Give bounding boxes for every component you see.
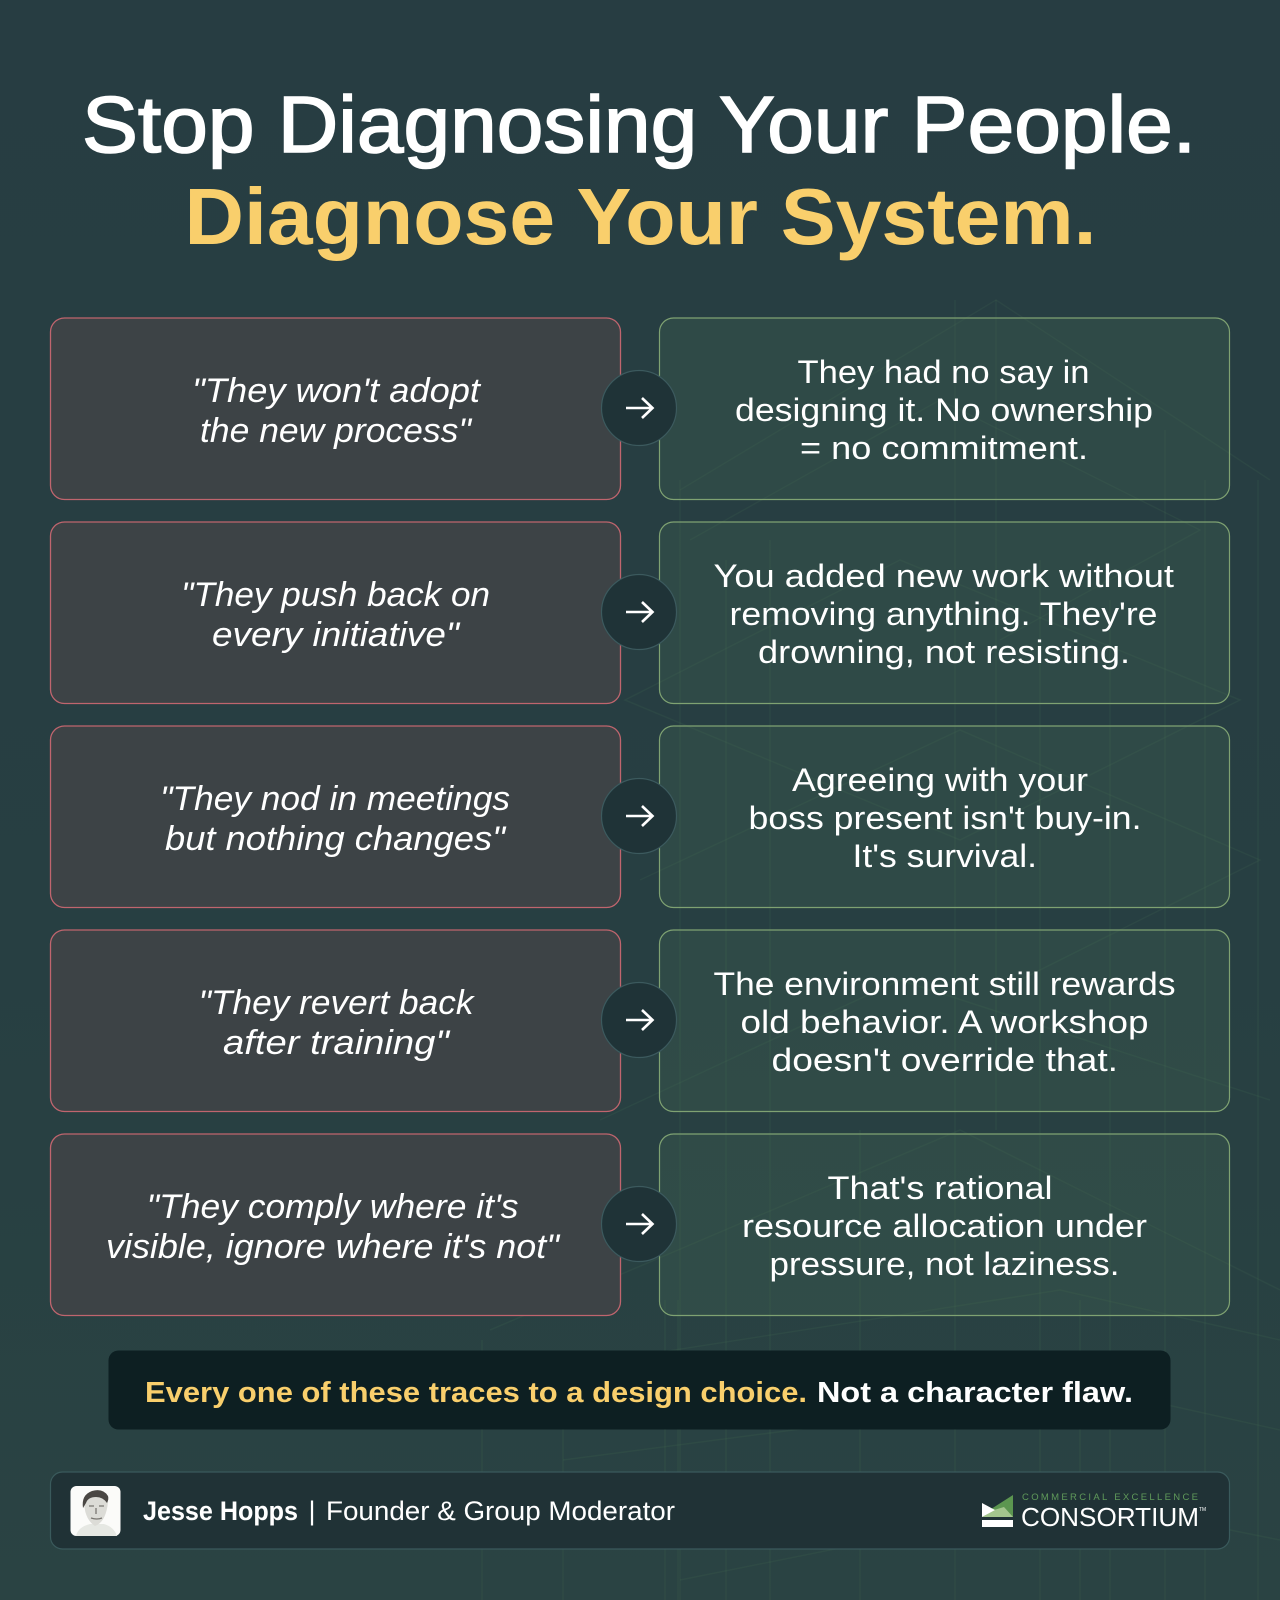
- logo: Commercial Excellence Consortium: TM: [1199, 1507, 1206, 1513]
- row 4: [50, 930, 1230, 1112]
- panel: blame statement 4: [50, 930, 620, 1112]
- panel: system cause 3: [660, 726, 1230, 908]
- panel: blame statement 1: "They won't adopt: [192, 372, 482, 410]
- panel: system cause 1: = no commitment.: [800, 430, 1088, 466]
- panel: blame statement 2: every initiative": [212, 616, 461, 654]
- panel: blame statement 1: [50, 318, 620, 500]
- footer bar: [50, 1472, 1230, 1549]
- row 2: [50, 522, 1230, 704]
- panel: system cause 2: [660, 522, 1230, 704]
- icon: arrow 4: [602, 982, 676, 1058]
- panel: blame statement 4: "They revert back: [198, 984, 476, 1022]
- panel: blame statement 2: "They push back on: [181, 576, 490, 614]
- panel: system cause 1: They had no say in: [798, 354, 1090, 390]
- title: Stop Diagnosing Your People.: [82, 80, 1196, 169]
- author name and role: [143, 1496, 675, 1526]
- logo: Commercial Excellence Consortium: COMMERCIAL EXCELLENCE: [1022, 1492, 1198, 1503]
- panel: system cause 4: [660, 930, 1230, 1112]
- logo: Commercial Excellence Consortium: CONSORTIUM: [1021, 1502, 1199, 1532]
- logo: Commercial Excellence Consortium: [982, 1492, 1206, 1532]
- icon: arrow 2: [602, 574, 676, 650]
- author name and role: Founder & Group Moderator: [326, 1496, 675, 1526]
- panel: system cause 5: That's rational: [828, 1170, 1052, 1206]
- panel: system cause 1: [660, 318, 1230, 500]
- panel: system cause 3: Agreeing with your: [792, 762, 1088, 798]
- panel: system cause 1: designing it. No ownership: [735, 392, 1153, 428]
- panel: system cause 3: boss present isn't buy-in.: [748, 800, 1142, 836]
- row 3: [50, 726, 1230, 908]
- title: Diagnose Your System.: [184, 172, 1096, 261]
- panel: system cause 2: You added new work without: [714, 558, 1174, 594]
- panel: blame statement 3: [50, 726, 620, 908]
- panel: blame statement 1: the new process": [200, 412, 473, 450]
- row 5: [50, 1134, 1230, 1316]
- panel: blame statement 2: [50, 522, 620, 704]
- panel: system cause 5: resource allocation under: [742, 1208, 1147, 1244]
- icon: arrow 3: [602, 778, 676, 854]
- panel: system cause 3: It's survival.: [852, 838, 1037, 874]
- panel: blame statement 5: visible, ignore where it's not": [106, 1228, 561, 1266]
- panel: system cause 4: doesn't override that.: [772, 1042, 1118, 1078]
- callout banner: [108, 1350, 1170, 1430]
- panel: blame statement 5: "They comply where it's: [146, 1188, 518, 1226]
- panel: system cause 5: [660, 1134, 1230, 1316]
- panel: system cause 2: drowning, not resisting.: [758, 634, 1130, 670]
- callout banner: Not a character flaw.: [817, 1377, 1133, 1409]
- icon: author portrait: [70, 1486, 120, 1536]
- author name and role: Jesse Hopps: [143, 1496, 298, 1526]
- title: [82, 80, 1196, 261]
- author name and role: |: [308, 1496, 316, 1526]
- icon: arrow 1: [602, 370, 676, 446]
- panel: blame statement 5: [50, 1134, 620, 1316]
- background building wireframe: [482, 300, 1280, 1600]
- panel: blame statement 3: but nothing changes": [165, 820, 507, 858]
- callout banner: Every one of these traces to a design choice.: [145, 1377, 807, 1409]
- icon: arrow 5: [602, 1186, 676, 1262]
- panel: system cause 2: removing anything. They're: [730, 596, 1158, 632]
- panel: system cause 4: old behavior. A workshop: [740, 1004, 1148, 1040]
- row 1: [50, 318, 1230, 500]
- panel: system cause 5: pressure, not laziness.: [770, 1246, 1120, 1282]
- panel: system cause 4: The environment still rewards: [714, 966, 1176, 1002]
- panel: blame statement 3: "They nod in meetings: [160, 780, 510, 818]
- panel: blame statement 4: after training": [223, 1024, 451, 1062]
